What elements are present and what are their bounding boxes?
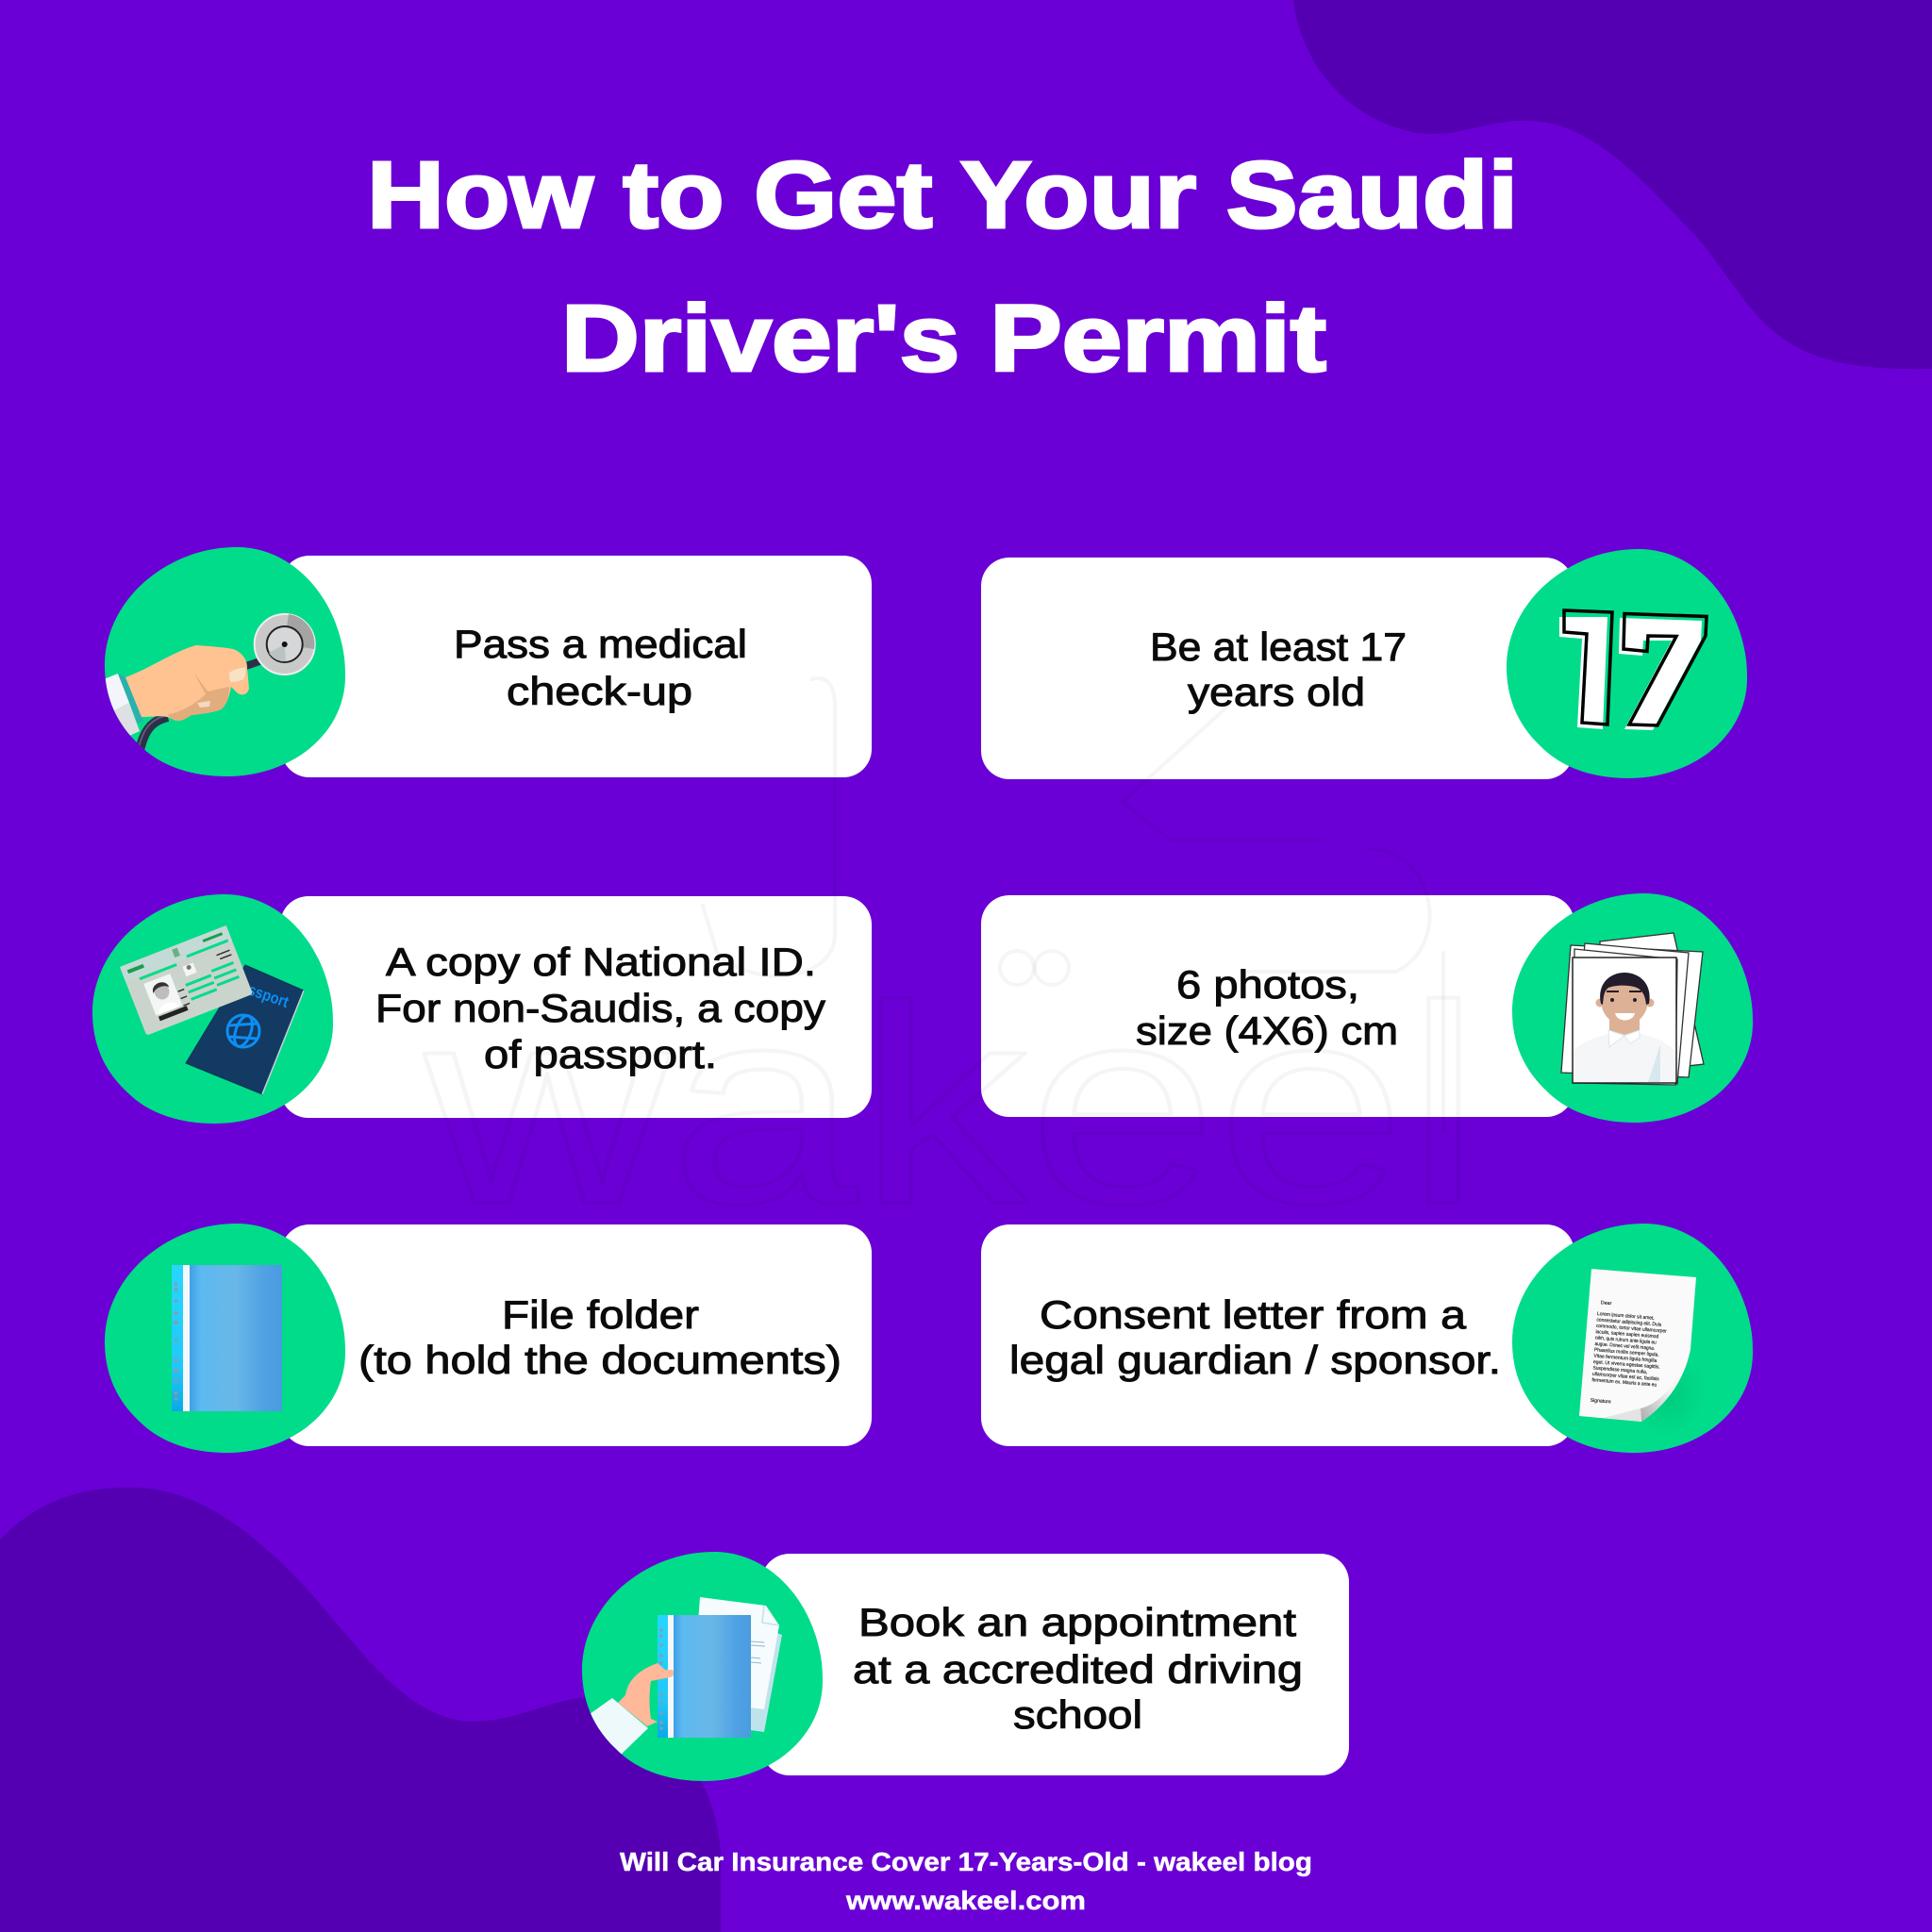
icon: national ID and passport [92, 894, 333, 1124]
footer credit: www.wakeel.com [845, 1886, 1086, 1915]
icon: hand holding folder with papers [582, 1552, 823, 1781]
text: file folder [358, 1292, 841, 1382]
icon: consent letter: iaculis, sapien sapien euismod [1595, 1329, 1658, 1340]
text: appointment [853, 1600, 1303, 1737]
watermark [419, 678, 1481, 1263]
text: appointment: Book an appointment [858, 1600, 1296, 1644]
text: national ID: A copy of National ID. [386, 940, 816, 984]
text: consent letter [1009, 1292, 1501, 1382]
icon: consent letter: ullamcorper vitae est ac, facilisis [1592, 1372, 1659, 1382]
title: Driver's Permit [561, 286, 1326, 391]
text: medical check-up: check-up [507, 669, 692, 713]
text: age [1150, 625, 1407, 714]
text: consent letter: legal guardian / sponsor. [1009, 1338, 1501, 1382]
icon: consent letter: Suspendisse magna nulla, [1592, 1365, 1647, 1375]
icon: consent letter [1512, 1224, 1753, 1453]
footer credit [620, 1847, 1312, 1915]
text: consent letter: Consent letter from a [1040, 1292, 1467, 1337]
text: appointment: school [1013, 1692, 1142, 1737]
icon: consent letter: Vitae fermentum ligula fringilla [1593, 1354, 1657, 1364]
card: national ID text panel [280, 896, 872, 1118]
card: age text panel [981, 558, 1574, 779]
text: national ID: For non-Saudis, a copy [375, 986, 825, 1030]
icon: consent letter: augue. Donec vel velit magna. [1594, 1341, 1655, 1352]
background shape: top right [1293, 0, 1932, 369]
card: photos text panel [981, 895, 1574, 1117]
text: national ID: of passport. [484, 1032, 717, 1076]
text: photos: size (4X6) cm [1136, 1008, 1398, 1053]
icon: consent letter: nibh, quis rutrum ante ligula eu [1595, 1336, 1657, 1346]
text: medical check-up [454, 622, 747, 713]
footer credit: Will Car Insurance Cover 17-Years-Old - wakeel blog [620, 1847, 1312, 1876]
icon: national ID and passport: Passport [230, 975, 291, 1011]
icon: stethoscope in hand [99, 547, 345, 776]
text: national ID [375, 940, 825, 1076]
icon: file folder [105, 1224, 345, 1453]
card: consent letter text panel [981, 1224, 1574, 1446]
icon: consent letter: commodo, tortor vitae ullamcorper [1596, 1324, 1667, 1335]
icon: consent letter: Dear [1601, 1300, 1612, 1307]
icon: consent letter: eget. Ut viverra egestas sagittis. [1593, 1359, 1660, 1371]
text: medical check-up: Pass a medical [454, 622, 747, 666]
icon: consent letter: Phasellus mollis semper ligula. [1594, 1347, 1659, 1358]
card: file folder text panel [281, 1224, 872, 1446]
title: How to Get Your Saudi [367, 142, 1518, 248]
icon: consent letter: Lorem ipsum dolor sit amet, [1597, 1311, 1655, 1322]
text: age: Be at least 17 [1150, 625, 1407, 669]
icon: six photos [1512, 893, 1753, 1123]
icon: consent letter: consectetur adipiscing elit. Duis [1596, 1317, 1662, 1328]
card: medical text panel [281, 556, 872, 777]
background shape: bottom left [0, 1488, 721, 1932]
text: appointment: at a accredited driving [853, 1647, 1303, 1691]
title [367, 142, 1518, 391]
icon: 17 [1507, 549, 1747, 778]
text: photos [1136, 962, 1398, 1053]
text: file folder: File folder [502, 1292, 699, 1337]
text: photos: 6 photos, [1176, 962, 1359, 1007]
text: age: years old [1188, 670, 1365, 714]
icon: consent letter: Signature [1590, 1398, 1611, 1405]
text: file folder: (to hold the documents) [358, 1338, 841, 1382]
watermark: wakeel [419, 946, 1481, 1263]
icon: consent letter: fermentum ex. Mauris a ante eu [1591, 1377, 1657, 1389]
card: appointment text panel [761, 1554, 1349, 1775]
